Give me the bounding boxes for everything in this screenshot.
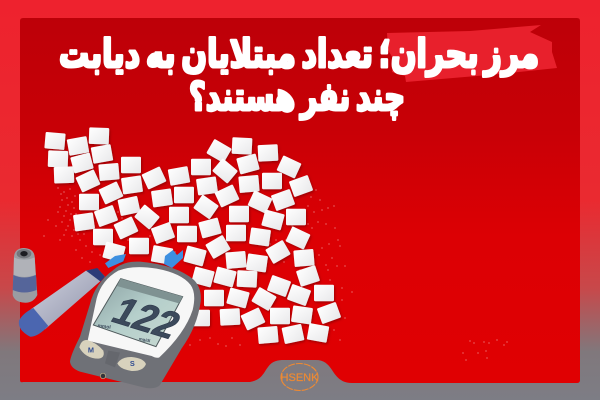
title bbox=[59, 32, 539, 120]
brush highlight behind title bbox=[387, 25, 557, 82]
icon: lancing pen bbox=[19, 254, 126, 337]
sugar cubes bbox=[44, 127, 341, 344]
meter screen: mg/dl bbox=[138, 336, 151, 343]
logo: HSENK bbox=[280, 372, 319, 384]
meter screen: 122 bbox=[104, 290, 188, 347]
meter S button: S bbox=[130, 359, 135, 368]
icon: test strip bbox=[164, 250, 183, 268]
meter M button: M bbox=[88, 345, 94, 354]
icon: glucose meter bbox=[70, 262, 201, 388]
sugar grains bbox=[44, 188, 507, 360]
icon: lancet cap bbox=[13, 248, 37, 303]
logo bbox=[280, 364, 319, 390]
title: چند نفر هستند؟ bbox=[189, 75, 405, 120]
meter screen: mmol bbox=[97, 323, 112, 331]
